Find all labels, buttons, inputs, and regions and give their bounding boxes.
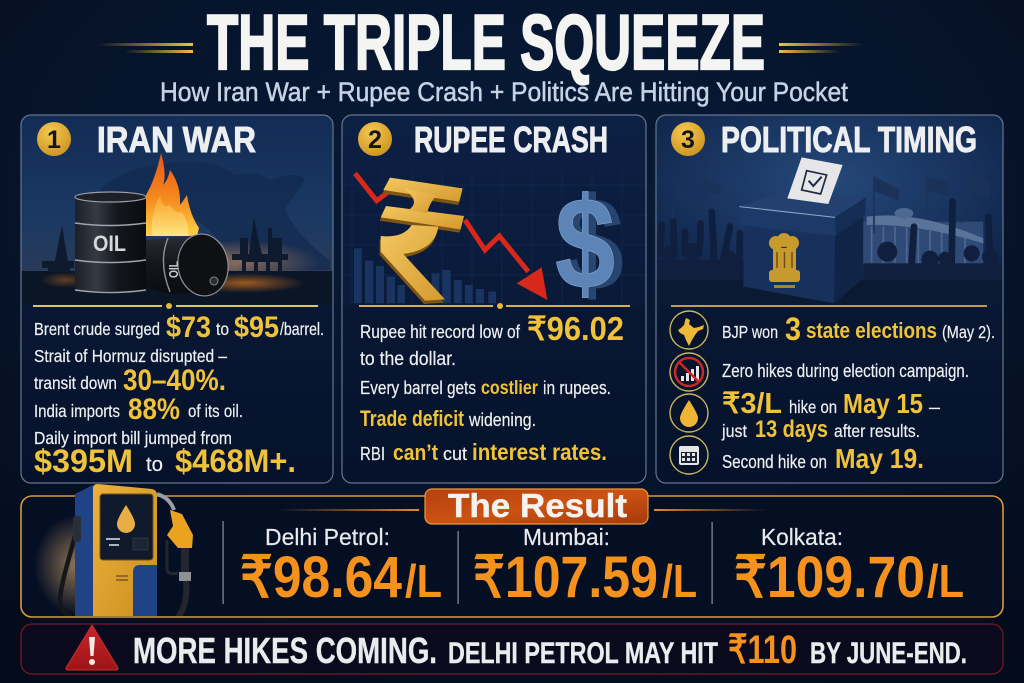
upright oil barrel: OIL — [93, 231, 126, 256]
text: first hike: 13 days — [755, 416, 828, 443]
panel border — [21, 115, 333, 483]
divider — [359, 303, 630, 309]
result dividers — [222, 521, 713, 604]
text: hormuz: transit down — [34, 373, 117, 393]
kolkata price: Kolkata: — [761, 524, 843, 550]
panel border — [656, 115, 1003, 483]
text: first hike: after results. — [834, 421, 920, 441]
mumbai price: ₹107.59 — [473, 545, 658, 610]
text: brent crude: $73 — [166, 311, 211, 344]
icon: fuel pump — [60, 484, 193, 617]
warning text: ₹110 — [728, 628, 797, 672]
text: first hike: hike on — [789, 397, 837, 417]
warning banner — [21, 624, 1003, 674]
mumbai price: /L — [662, 555, 697, 607]
icon: warning triangle — [66, 625, 118, 670]
right title flourish — [779, 43, 863, 53]
icon: oil drop — [670, 394, 708, 432]
text: rbi: cut — [443, 444, 467, 464]
text: trade deficit: widening. — [468, 410, 536, 430]
icon: india map — [670, 311, 708, 349]
text: import bill: $395M — [34, 443, 133, 479]
text: record low: ₹96.02 — [527, 310, 624, 347]
text: india imports — [34, 393, 243, 426]
heading: RUPEE CRASH — [414, 119, 608, 160]
text: zero hikes: Zero hikes during election campaign. — [722, 361, 969, 381]
panel border — [342, 115, 646, 483]
text: costlier: Every barrel gets — [360, 378, 476, 398]
warning text — [133, 628, 967, 672]
text: second hike: May 19. — [835, 443, 924, 474]
text: import bill: $468M+. — [175, 443, 296, 479]
text: hormuz — [34, 346, 227, 397]
text: rbi — [360, 439, 607, 465]
warning text: BY JUNE-END. — [810, 637, 967, 670]
emblem on ballot box — [769, 233, 800, 288]
icon: calendar — [670, 436, 708, 474]
illustration: rupee symbol, falling arrow, dollar — [342, 115, 646, 305]
text: costlier: in rupees. — [543, 378, 611, 398]
text: costlier — [360, 378, 611, 399]
text: brent crude: to — [216, 319, 229, 339]
text: second hike: Second hike on — [722, 452, 827, 472]
text: india imports: India imports — [34, 401, 120, 421]
heading: IRAN WAR — [97, 119, 256, 160]
divider — [671, 305, 987, 307]
text: rbi: can’t — [393, 440, 439, 465]
text: second hike — [722, 443, 924, 474]
badge 1 — [37, 122, 71, 156]
mumbai price: Mumbai: — [523, 524, 610, 550]
result badge: The Result — [448, 487, 627, 524]
flame — [144, 153, 199, 236]
warning text: DELHI PETROL MAY HIT — [448, 637, 718, 670]
text: import bill: Daily import bill jumped from — [34, 428, 232, 448]
text: record low — [360, 310, 624, 370]
toppled oil barrel: OIL — [166, 261, 181, 278]
text: import bill — [34, 428, 296, 479]
text: bjp won — [722, 311, 995, 347]
text: rbi: RBI — [360, 444, 385, 464]
upright oil barrel — [75, 192, 146, 292]
badge 3 — [671, 122, 705, 156]
badge 2 — [358, 122, 392, 156]
kolkata price: ₹109.70 — [734, 545, 925, 610]
delhi price: ₹98.64 — [240, 545, 402, 610]
glow behind pump — [34, 515, 118, 615]
delhi price: Delhi Petrol: — [265, 524, 390, 550]
text: brent crude: Brent crude surged — [34, 319, 160, 339]
illustration: ballot box and crowd — [656, 115, 1003, 310]
delhi price: /L — [405, 555, 442, 607]
icon: no hikes — [670, 353, 708, 391]
text: record low: Rupee hit record low of — [360, 322, 521, 342]
badge 2: 2 — [368, 126, 382, 154]
panel: the result — [21, 484, 1003, 617]
text: first hike: – — [929, 397, 940, 417]
text: first hike: ₹3/L — [722, 388, 782, 420]
text: costlier: costlier — [481, 378, 539, 399]
illustration: oil barrels on fire at sea — [21, 115, 333, 305]
badge 1: 1 — [47, 126, 61, 154]
text: bjp won: state elections — [806, 318, 937, 343]
text: brent crude: /barrel. — [280, 319, 324, 339]
divider — [33, 303, 318, 309]
text: bjp won: 3 — [785, 311, 801, 347]
panel: rupee crash — [342, 115, 646, 483]
text: brent crude — [34, 311, 324, 344]
text: brent crude: $95 — [234, 311, 279, 344]
toppled oil barrel — [146, 231, 232, 299]
text: first hike: just — [721, 421, 747, 441]
badge 3: 3 — [681, 126, 695, 154]
delhi price — [240, 524, 442, 610]
left title flourish — [98, 43, 193, 53]
subtitle: How Iran War + Rupee Crash + Politics Are Hitting Your Pocket — [160, 77, 848, 107]
dollar symbol: $ — [555, 170, 615, 316]
panel: iran war — [21, 115, 333, 483]
text: first hike: May 15 — [843, 388, 923, 419]
text: bjp won: (May 2). — [942, 322, 995, 342]
result accent lines — [277, 509, 767, 511]
text: rbi: interest rates. — [472, 439, 607, 465]
text: hormuz: Strait of Hormuz disrupted – — [34, 346, 227, 366]
kolkata price: /L — [927, 555, 964, 607]
text: india imports: of its oil. — [188, 401, 243, 421]
text: trade deficit: Trade deficit — [360, 406, 465, 431]
text: hormuz: 30–40%. — [123, 364, 226, 397]
text: india imports: 88% — [128, 393, 180, 426]
text: bjp won: BJP won — [722, 322, 778, 342]
text: record low: to the dollar. — [360, 349, 456, 370]
dollar symbol: $ — [561, 171, 623, 317]
text: first hike — [721, 388, 940, 443]
text: import bill: to — [146, 454, 163, 476]
panel: political timing — [656, 115, 1003, 483]
warning text: MORE HIKES COMING. — [133, 630, 437, 671]
